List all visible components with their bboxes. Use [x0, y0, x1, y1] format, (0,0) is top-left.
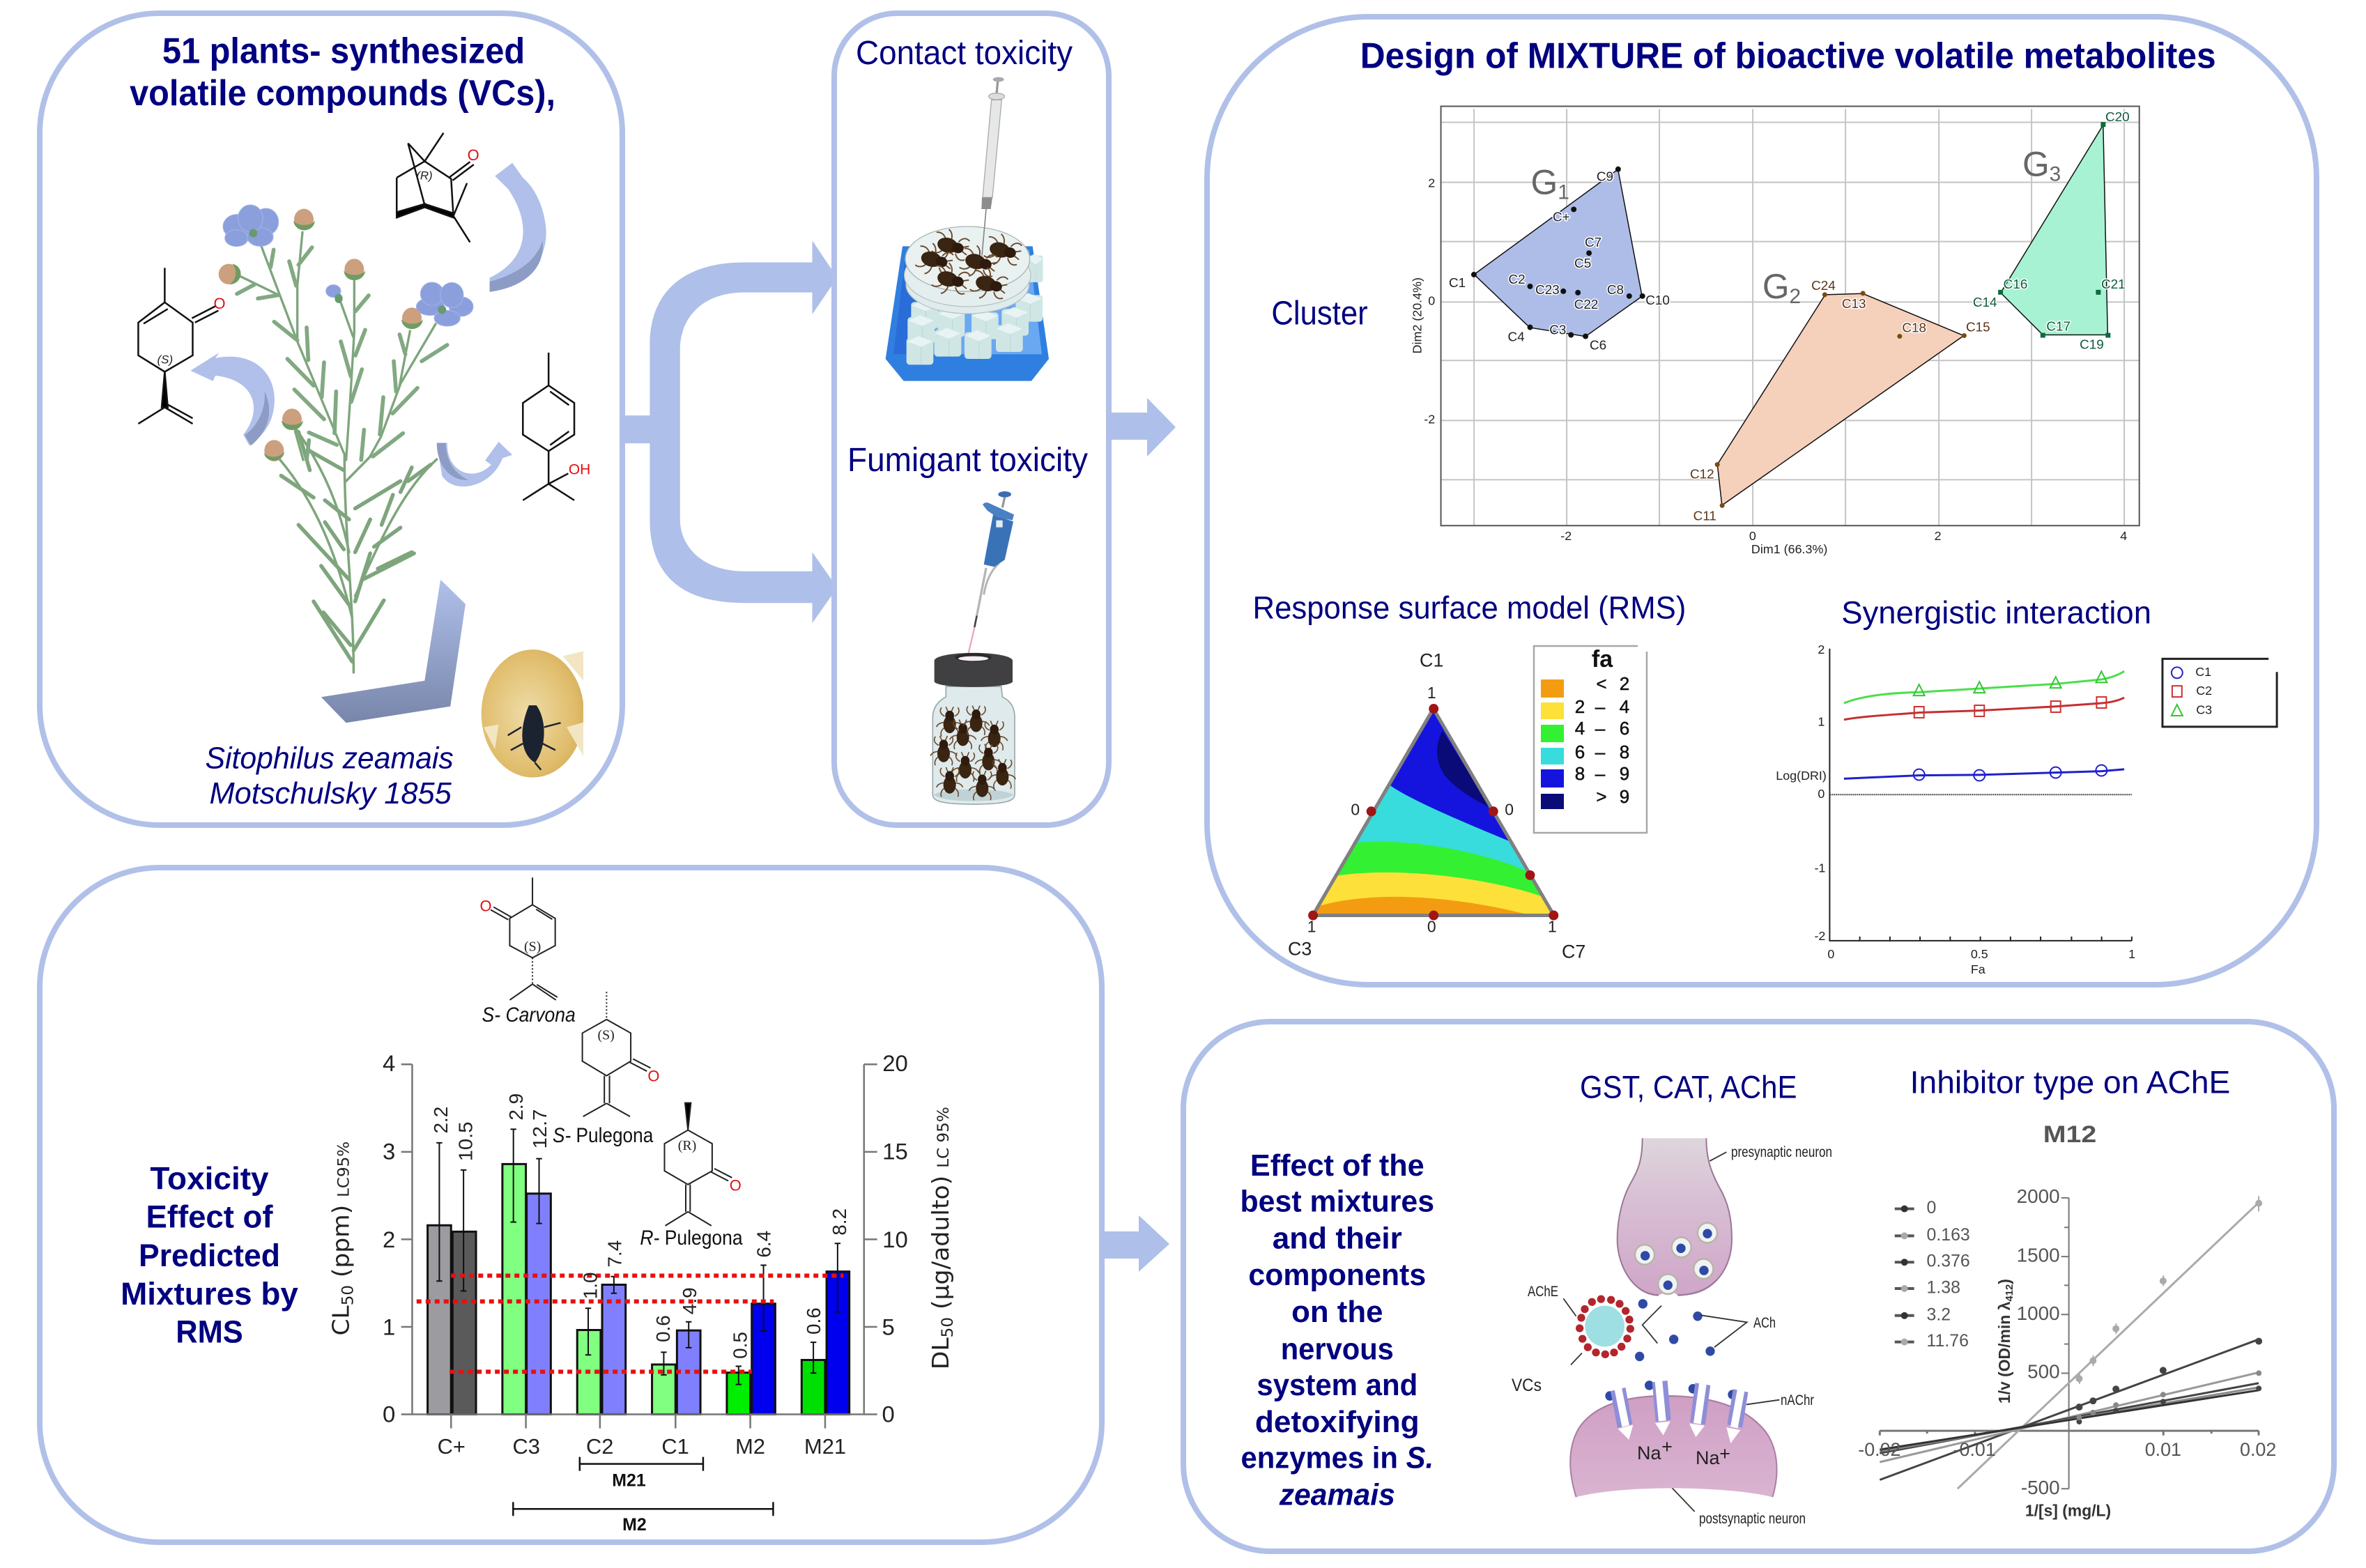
chart: synergy dose-reduction index: -1	[1814, 861, 1825, 875]
chart: cluster scatter plot: 4	[2120, 529, 2127, 543]
chart: CL50 and DL50 bars: 1.0	[580, 1273, 601, 1299]
chart: cluster scatter plot: Dim1 (66.3%)	[1751, 542, 1827, 556]
legend: inhibitor concentrations	[1895, 1198, 1970, 1351]
diagram: cholinergic synapse: VCs	[1512, 1376, 1542, 1395]
icon: syringe and petri dish on ice	[886, 77, 1049, 381]
legend: inhibitor concentrations: 0	[1927, 1198, 1936, 1217]
heading: toxicity effect: Effect of	[146, 1199, 273, 1234]
diagram: cholinergic synapse: +	[1661, 1436, 1673, 1457]
chart: CL50 and DL50 bars: 0	[383, 1401, 395, 1427]
chart: CL50 and DL50 bars: (µg/adulto)	[928, 1168, 954, 1317]
diagram: cholinergic synapse: presynaptic neuron	[1731, 1144, 1832, 1160]
icon: camphor molecule: (R)	[416, 169, 433, 183]
heading: effect of best mixtures: enzymes in S.	[1240, 1441, 1434, 1475]
chart: ternary response surface: 0	[1427, 917, 1436, 935]
legend: fa scale: fa	[1592, 646, 1613, 672]
icon: R-pulegone molecule: R- Pulegona	[640, 1227, 743, 1250]
chart: CL50 and DL50 bars: 0.5	[730, 1332, 751, 1359]
legend: fa scale: 6	[1575, 741, 1585, 762]
chart: cluster scatter plot: C5	[1574, 256, 1591, 271]
heading: fumigant toxicity: Fumigant toxicity	[847, 442, 1088, 479]
legend: fa scale: 4	[1620, 696, 1629, 717]
chart: CL50 and DL50 bars: 20	[882, 1050, 908, 1076]
chart: cluster scatter plot: C22	[1574, 298, 1598, 312]
heading: effect of best mixtures: best mixtures	[1240, 1185, 1434, 1219]
chart: synergy dose-reduction index: 1	[1818, 715, 1825, 729]
legend: inhibitor concentrations: 1.38	[1927, 1278, 1960, 1298]
chart: CL50 and DL50 bars: C+	[438, 1434, 466, 1459]
chart: Lineweaver-Burk plot M12: -0.01	[1953, 1439, 1996, 1460]
arrow: toxicity to enzymes	[1103, 1215, 1169, 1272]
legend: synergy series: C2	[2196, 684, 2212, 698]
heading: toxicity effect	[121, 1161, 298, 1349]
chart: cluster scatter plot: C12	[1690, 468, 1714, 482]
chart: CL50 and DL50 bars	[328, 1050, 957, 1535]
chart: cluster scatter plot: C17	[2046, 320, 2071, 335]
chart: cluster scatter plot: C9	[1597, 170, 1613, 185]
icon: flax plant	[219, 205, 473, 672]
chart: Lineweaver-Burk plot M12: 1/[s] (mg/L)	[2025, 1501, 2111, 1519]
label: cluster: Cluster	[1271, 295, 1368, 332]
chart: ternary response surface: 0	[1351, 800, 1360, 818]
chart: CL50 and DL50 bars: 2.9	[505, 1093, 527, 1121]
chart: synergy dose-reduction index: 0.5	[1971, 947, 1988, 961]
chart: CL50 and DL50 bars: C2	[586, 1434, 613, 1459]
chart: CL50 and DL50 bars: 3	[383, 1139, 395, 1165]
chart: cluster scatter plot: C16	[2004, 277, 2027, 292]
chart: CL50 and DL50 bars: 5	[882, 1314, 895, 1339]
diagram: cholinergic synapse: +	[1719, 1443, 1730, 1464]
chart: CL50 and DL50 bars: 10	[882, 1227, 908, 1252]
legend: fa scale: 9	[1620, 786, 1629, 807]
chart: synergy dose-reduction index: 0	[1827, 947, 1834, 961]
chart: cluster scatter plot: C13	[1842, 297, 1866, 312]
chart: cluster scatter plot: C18	[1902, 321, 1926, 336]
chart: Lineweaver-Burk plot M12: 1/v (OD/min λ	[1995, 1302, 2013, 1404]
heading: synergistic interaction: Synergistic interaction	[1841, 595, 2151, 631]
chart: CL50 and DL50 bars: 0	[882, 1401, 895, 1427]
icon: terpineol molecule	[523, 353, 590, 500]
icon: S-carvone molecule: (S)	[524, 939, 541, 954]
icon: S-carvone molecule	[480, 877, 576, 1027]
legend: fa scale: >	[1596, 786, 1607, 807]
heading: effect of best mixtures: Effect of the	[1250, 1148, 1424, 1183]
chart: cluster scatter plot: 1	[1558, 181, 1569, 204]
chart: synergy dose-reduction index: 1	[2128, 947, 2135, 961]
chart: Lineweaver-Burk plot M12: 412	[2004, 1284, 2015, 1302]
chart: CL50 and DL50 bars: LC 95%	[935, 1107, 953, 1168]
legend: synergy series: C1	[2195, 665, 2211, 679]
arrow: assays to design	[1109, 398, 1176, 456]
diagram: cholinergic synapse: Na	[1696, 1447, 1720, 1468]
heading: effect of best mixtures: components	[1248, 1258, 1426, 1292]
icon: camphor molecule: O	[468, 146, 479, 164]
icon: pipette and vial with insects	[930, 491, 1015, 804]
chart: CL50 and DL50 bars: C1	[661, 1434, 689, 1459]
chart: cluster scatter plot: 3	[2050, 163, 2061, 186]
legend: fa scale: 9	[1620, 763, 1629, 784]
chart: cluster scatter plot: 0	[1749, 529, 1756, 543]
chart: cluster scatter plot: C23	[1535, 283, 1560, 298]
chart: cluster scatter plot: -2	[1560, 529, 1572, 543]
legend: inhibitor concentrations: 0.376	[1927, 1252, 1970, 1271]
chart: cluster scatter plot: C21	[2101, 277, 2126, 292]
chart: Lineweaver-Burk plot M12: 500	[2027, 1361, 2060, 1383]
heading: toxicity effect: RMS	[176, 1314, 243, 1350]
chart: CL50 and DL50 bars: 15	[882, 1139, 908, 1165]
icon: S-pulegone molecule: O	[647, 1067, 659, 1084]
chart: CL50 and DL50 bars: 8.2	[829, 1208, 850, 1236]
heading: effect of best mixtures: system and	[1257, 1368, 1418, 1402]
chart: cluster scatter plot: C24	[1811, 279, 1836, 293]
heading: toxicity effect: Toxicity	[150, 1161, 269, 1197]
bracket: M2 components: M2	[622, 1515, 647, 1535]
chart: ternary response surface: C7	[1562, 941, 1585, 962]
icon: S-pulegone molecule: (S)	[597, 1028, 615, 1043]
chart: cluster scatter plot: C+	[1553, 210, 1570, 224]
heading: effect of best mixtures: detoxifying	[1255, 1405, 1420, 1439]
chart: CL50 and DL50 bars: 7.4	[604, 1240, 626, 1268]
chart: CL50 and DL50 bars: (ppm)	[328, 1197, 354, 1285]
icon: camphor molecule	[397, 133, 479, 243]
heading: contact toxicity: Contact toxicity	[856, 35, 1073, 72]
chart: CL50 and DL50 bars: CL	[328, 1307, 354, 1336]
chart: cluster scatter plot: C19	[2080, 338, 2104, 353]
chart: cluster scatter plot: G	[1762, 267, 1790, 306]
chart: cluster scatter plot: C10	[1645, 293, 1670, 308]
legend: fa scale: –	[1595, 763, 1606, 784]
heading: mixture design: Design of MIXTURE of bioactive volatile metabolites	[1360, 36, 2216, 76]
icon: R-pulegone molecule	[640, 1103, 743, 1250]
chart: CL50 and DL50 bars: 50	[939, 1317, 957, 1337]
heading: toxicity effect: Predicted	[139, 1238, 280, 1273]
chart: cluster scatter plot: C2	[1509, 272, 1526, 287]
panel: nervous system and enzymes	[1183, 1022, 2334, 1551]
chart: cluster scatter plot: C1	[1449, 276, 1466, 291]
bracket: M21 components: M21	[612, 1470, 646, 1490]
chart: cluster scatter plot: 2	[1428, 176, 1435, 190]
legend: fa scale: –	[1595, 718, 1606, 739]
chart: CL50 and DL50 bars: C3	[512, 1434, 540, 1459]
legend: fa scale: 8	[1575, 763, 1585, 784]
icon: R-pulegone molecule: O	[730, 1177, 742, 1194]
chart: cluster scatter plot: 2	[1935, 529, 1942, 543]
chart: CL50 and DL50 bars: 4	[383, 1050, 395, 1076]
chart: ternary response surface: 1	[1307, 917, 1316, 935]
chart: CL50 and DL50 bars: DL	[928, 1339, 954, 1369]
legend: fa scale: –	[1595, 696, 1606, 717]
chart: synergy dose-reduction index: Log(DRI)	[1776, 769, 1827, 783]
chart: cluster scatter plot: 0	[1428, 294, 1435, 308]
heading: volatile compounds	[130, 31, 555, 113]
chart: CL50 and DL50 bars: LC95%	[335, 1142, 353, 1197]
legend: fa scale: <	[1596, 673, 1607, 694]
icon: R-pulegone molecule: (R)	[678, 1138, 696, 1153]
text: species name	[206, 741, 454, 810]
arrow: bracket to toxicity assays	[622, 240, 837, 623]
chart: CL50 and DL50 bars: 0.6	[652, 1315, 674, 1342]
icon: S-pulegone molecule	[553, 992, 659, 1147]
heading: volatile compounds: 51 plants- synthesized	[162, 31, 525, 71]
diagram: cholinergic synapse	[1512, 1138, 1832, 1527]
icon: curved arrows to molecules	[190, 163, 546, 723]
chart: Lineweaver-Burk plot M12: 0.01	[2145, 1439, 2181, 1460]
chart: Lineweaver-Burk plot M12: -0.02	[1858, 1439, 1901, 1460]
icon: carvone molecule	[138, 268, 225, 424]
legend: fa scale: 4	[1575, 718, 1585, 739]
chart: cluster scatter plot: C7	[1585, 236, 1601, 250]
chart: ternary response surface: 1	[1427, 684, 1436, 702]
heading: effect of best mixtures: on the	[1291, 1295, 1383, 1329]
chart: cluster scatter plot: C3	[1549, 323, 1566, 338]
diagram: cholinergic synapse: nAChr	[1781, 1392, 1814, 1408]
legend: inhibitor concentrations: 11.76	[1927, 1331, 1969, 1351]
icon: terpineol molecule: OH	[569, 462, 590, 478]
bracket: M21 components	[580, 1457, 703, 1490]
chart: cluster scatter plot: G	[2022, 145, 2050, 184]
chart: Lineweaver-Burk plot M12: 2000	[2017, 1185, 2060, 1207]
legend: fa scale	[1534, 646, 1647, 833]
chart: CL50 and DL50 bars: M21	[804, 1434, 846, 1459]
chart: ternary response surface: C1	[1420, 650, 1443, 670]
chart: cluster scatter plot: C11	[1693, 509, 1716, 523]
diagram: cholinergic synapse: ACh	[1753, 1315, 1776, 1331]
chart: CL50 and DL50 bars: 12.7	[529, 1109, 551, 1148]
legend: synergy series: C3	[2196, 703, 2212, 717]
icon: chevron arrow	[321, 580, 466, 723]
chart: ternary response surface: C3	[1288, 938, 1312, 959]
chart: cluster scatter plot: C6	[1590, 339, 1606, 353]
chart: ternary response surface: 0	[1505, 800, 1514, 818]
icon: S-pulegone molecule: S- Pulegona	[553, 1124, 654, 1147]
chart: CL50 and DL50 bars: 10.5	[455, 1122, 477, 1161]
icon: S-carvone molecule: O	[480, 898, 492, 915]
icon: carvone molecule: O	[213, 295, 225, 312]
chart: ternary response surface	[1288, 650, 1585, 962]
heading: GST CAT AChE: GST, CAT, AChE	[1580, 1069, 1797, 1105]
chart: CL50 and DL50 bars: 50	[339, 1285, 357, 1305]
chart: Lineweaver-Burk plot M12: 1000	[2017, 1302, 2060, 1324]
panel: mixture design	[1207, 17, 2317, 985]
chart: CL50 and DL50 bars: M2	[735, 1434, 765, 1459]
heading: effect of best mixtures: zeamais	[1279, 1477, 1395, 1512]
legend: synergy series	[2163, 659, 2277, 727]
heading: volatile compounds: volatile compounds (VCs),	[130, 72, 555, 113]
heading: effect of best mixtures	[1240, 1148, 1434, 1512]
chart: cluster scatter plot: C20	[2105, 110, 2130, 125]
chart: cluster scatter plot	[1410, 106, 2140, 556]
heading: response surface model: Response surface model (RMS)	[1253, 590, 1686, 626]
chart: cluster scatter plot: C15	[1966, 321, 1990, 335]
chart: CL50 and DL50 bars: 2	[383, 1227, 395, 1252]
panel: volatile compounds	[40, 13, 622, 825]
chart: Lineweaver-Burk plot M12	[1858, 1121, 2276, 1519]
legend: fa scale: 6	[1620, 718, 1629, 739]
chart: synergy dose-reduction index: 0	[1818, 787, 1825, 801]
text: species name: Motschulsky 1855	[209, 776, 452, 810]
chart: cluster scatter plot: C8	[1607, 283, 1624, 298]
diagram: cholinergic synapse: AChE	[1528, 1284, 1558, 1300]
bracket: M2 components	[513, 1502, 773, 1535]
chart: synergy dose-reduction index: 2	[1818, 643, 1825, 656]
chart: CL50 and DL50 bars: 4.9	[679, 1287, 700, 1314]
chart: CL50 and DL50 bars: 6.4	[753, 1231, 774, 1258]
panel: toxicity assays	[834, 13, 1109, 825]
panel: toxicity of mixtures	[40, 868, 1102, 1542]
legend: fa scale: 8	[1620, 741, 1629, 762]
chart: cluster scatter plot: Dim2 (20.4%)	[1410, 277, 1424, 353]
heading: effect of best mixtures: and their	[1273, 1221, 1402, 1255]
heading: toxicity effect: Mixtures by	[121, 1276, 298, 1312]
chart: cluster scatter plot: -2	[1424, 413, 1435, 426]
chart: synergy dose-reduction index: -2	[1814, 929, 1825, 943]
chart: cluster scatter plot: C14	[1973, 295, 1997, 310]
chart: Lineweaver-Burk plot M12: M12	[2043, 1121, 2096, 1148]
icon: S-carvone molecule: S- Carvona	[482, 1004, 576, 1027]
legend: inhibitor concentrations: 0.163	[1927, 1225, 1970, 1245]
icon: carvone molecule: (S)	[158, 353, 173, 366]
image: weevil on maize	[482, 650, 585, 778]
chart: Lineweaver-Burk plot M12: -500	[2021, 1477, 2060, 1498]
legend: inhibitor concentrations: 3.2	[1927, 1305, 1951, 1324]
chart: Lineweaver-Burk plot M12: 0.02	[2240, 1439, 2276, 1460]
chart: cluster scatter plot: G	[1531, 163, 1558, 202]
diagram: cholinergic synapse: postsynaptic neuron	[1699, 1511, 1806, 1527]
chart: synergy dose-reduction index: Fa	[1971, 962, 1985, 976]
chart: CL50 and DL50 bars: 2.2	[430, 1107, 452, 1134]
legend: fa scale: 2	[1575, 696, 1585, 717]
chart: cluster scatter plot: C4	[1508, 330, 1525, 345]
chart: Lineweaver-Burk plot M12: 1500	[2017, 1245, 2060, 1266]
chart: CL50 and DL50 bars: 1	[383, 1314, 395, 1339]
heading: inhibitor type: Inhibitor type on AChE	[1910, 1064, 2230, 1100]
legend: fa scale: –	[1595, 741, 1606, 762]
chart: cluster scatter plot: 2	[1790, 285, 1801, 308]
text: species name: Sitophilus zeamais	[206, 741, 454, 775]
chart: CL50 and DL50 bars: 0.6	[803, 1307, 824, 1335]
heading: effect of best mixtures: nervous	[1281, 1332, 1394, 1366]
legend: fa scale: 2	[1620, 673, 1629, 694]
diagram: cholinergic synapse: Na	[1637, 1443, 1661, 1463]
chart: synergy dose-reduction index	[1776, 643, 2277, 976]
chart: Lineweaver-Burk plot M12: )	[1995, 1279, 2013, 1284]
chart: ternary response surface: 1	[1548, 917, 1557, 935]
